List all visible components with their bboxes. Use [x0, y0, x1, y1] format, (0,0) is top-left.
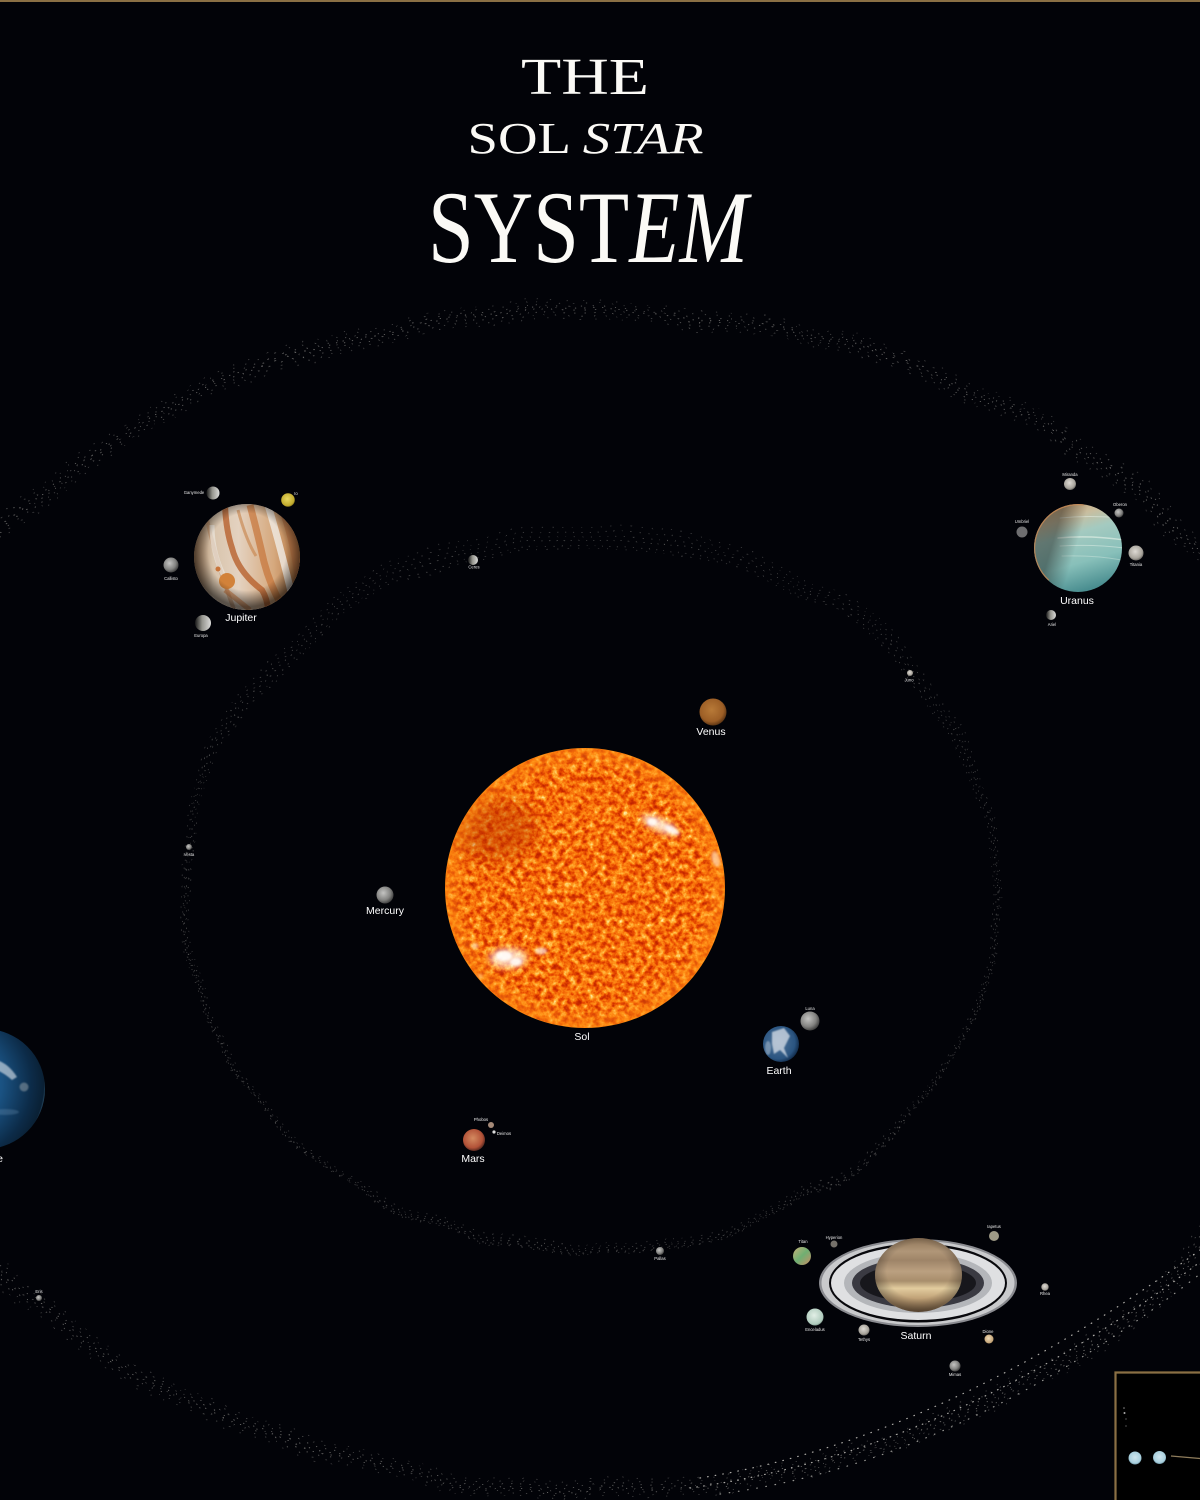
title: [428, 49, 752, 285]
dwarf planet: Eris: Eris: [35, 1289, 43, 1294]
moon: Enceladus: [805, 1308, 825, 1332]
planet: Uranus with moons: [1015, 472, 1144, 627]
dwarf planet: Ceres: [468, 555, 480, 570]
moon: Ganymede: [184, 486, 220, 500]
moon: Ariel: Ariel: [1048, 622, 1056, 627]
moon: Mimas: [949, 1360, 961, 1377]
planet: Earth with Luna: Earth: [766, 1065, 792, 1077]
top gold border: [0, 0, 1200, 2]
moon: Miranda: [1062, 472, 1078, 490]
moon: Dione: Dione: [983, 1329, 994, 1334]
moon: Ganymede: Ganymede: [184, 490, 205, 495]
saturn rings: [819, 1239, 1017, 1327]
moon: Titania: [1128, 546, 1144, 567]
dwarf planet: Pallas: [654, 1247, 666, 1261]
moon: Mimas: Mimas: [949, 1372, 961, 1377]
dwarf planet: Vesta: Vesta: [184, 852, 195, 857]
moon: Titania: Titania: [1130, 562, 1143, 567]
moon: Oberon: [1113, 502, 1128, 518]
sun: Sol: [440, 743, 730, 1043]
moon: Titan: Titan: [798, 1239, 808, 1244]
label: Sol: Sol: [574, 1031, 590, 1043]
moon: Miranda: Miranda: [1062, 472, 1078, 477]
planet: Earth with Luna: Luna: [805, 1006, 815, 1011]
planet: Mars with Phobos and Deimos: Deimos: [497, 1131, 511, 1136]
moon: Europa: Europa: [194, 633, 208, 638]
moon: Umbriel: Umbriel: [1015, 519, 1029, 524]
title: SYSTEM: [428, 171, 752, 285]
moon: Tethys: Tethys: [858, 1337, 870, 1342]
moon: Rhea: [1040, 1283, 1051, 1296]
moon: Europa: [194, 615, 211, 638]
moon: Oberon: Oberon: [1113, 502, 1128, 507]
planet: Earth with Luna: [763, 1006, 820, 1077]
moon: Io: [281, 491, 298, 507]
moon: Dione: [983, 1329, 994, 1344]
moon: Callisto: Callisto: [164, 576, 179, 581]
planet: Jupiter with moons: [164, 486, 300, 638]
moon: Callisto: [164, 558, 179, 581]
planet: Mercury: Mercury: [366, 905, 405, 917]
planet: Mars with Phobos and Deimos: Phobos: [474, 1117, 488, 1122]
moon: Rhea: Rhea: [1040, 1291, 1051, 1296]
dwarf planet: Juno: Juno: [904, 678, 914, 682]
planet: Mars with Phobos and Deimos: [461, 1117, 511, 1165]
planet: Venus: Venus: [696, 726, 726, 738]
planet: Saturn with rings and moons: [793, 1224, 1051, 1377]
planet: Neptune: [0, 1029, 45, 1165]
dwarf planet: Vesta: [184, 844, 195, 857]
label: Uranus: Uranus: [1060, 595, 1094, 607]
inset box: distant bodies: [1115, 1371, 1200, 1500]
inner asteroid belt: [179, 521, 1001, 1255]
planet: Mercury: [366, 886, 405, 917]
dwarf planet: Pallas: Pallas: [654, 1256, 666, 1261]
moon: Enceladus: Enceladus: [805, 1327, 825, 1332]
dwarf planet: Ceres: Ceres: [468, 564, 480, 570]
moon: Io: Io: [294, 491, 298, 496]
title: THE: [521, 49, 649, 106]
outer belt bright lower right arc: [690, 1250, 1200, 1494]
moon: Hyperion: Hyperion: [826, 1235, 843, 1240]
moon: Hyperion: [826, 1235, 843, 1248]
dwarf planet: Eris: [35, 1289, 43, 1301]
label: Saturn: Saturn: [901, 1330, 932, 1342]
moon: Ariel: [1046, 610, 1056, 627]
planet: Venus: [696, 698, 726, 738]
moon: Umbriel: [1015, 519, 1029, 538]
outer debris belt: [0, 301, 1200, 1499]
title: SOL STAR: [468, 114, 704, 163]
label: Jupiter: Jupiter: [225, 612, 257, 624]
moon: Titan: [793, 1239, 811, 1265]
moon: Iapetus: Iapetus: [987, 1224, 1001, 1229]
moon: Iapetus: [987, 1224, 1001, 1241]
planet: Mars with Phobos and Deimos: Mars: [461, 1153, 485, 1165]
moon: Tethys: [858, 1324, 870, 1342]
dwarf planet: Juno: [904, 670, 914, 682]
